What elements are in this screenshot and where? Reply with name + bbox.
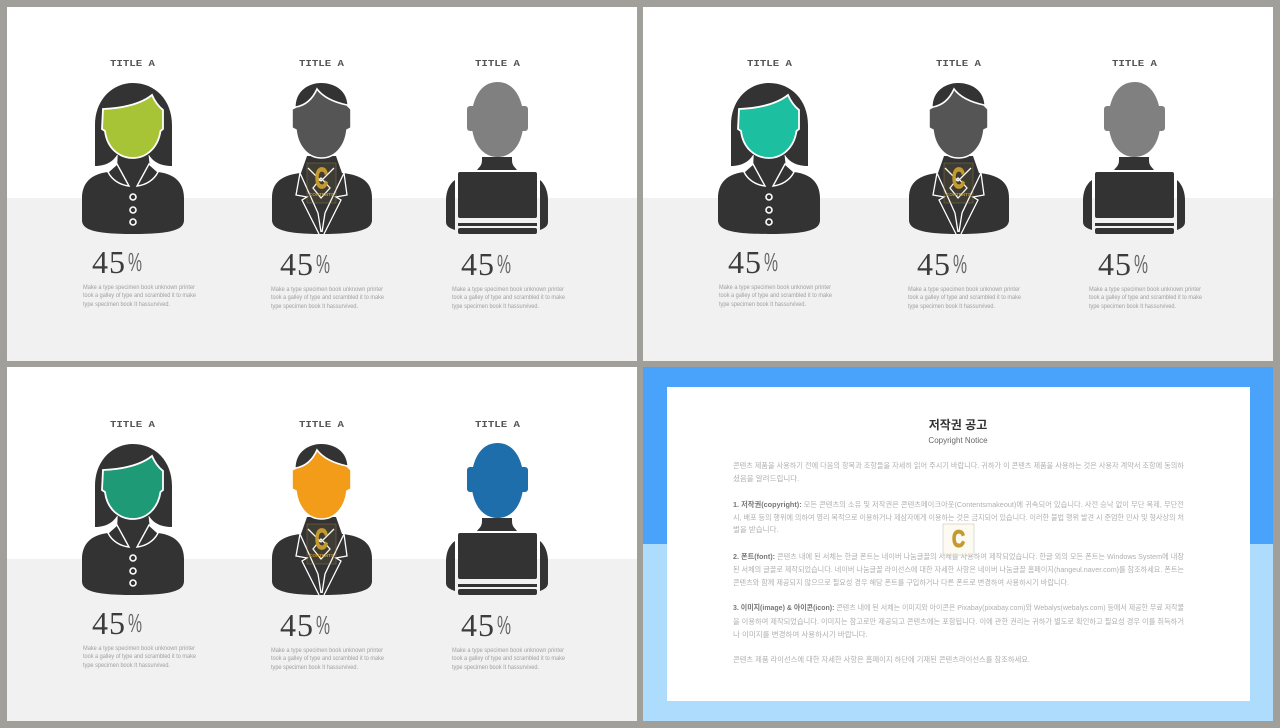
text block: copyright body: 시, 배포 등의 행위에 의하여 영리 목적으로 이용하거나 제삼자에게 이용하는 것은 금지되어 있습니다. 이러한 불법 행위 발견 시 준엄한 민사 및 형사상의 처: [733, 512, 1184, 522]
column: laptop: %: [1134, 249, 1148, 279]
column: laptop: Make a type specimen book unknown printer: [452, 287, 564, 293]
column: woman: type specimen book It hassurvived.: [83, 302, 170, 308]
column: man: %: [316, 610, 330, 640]
column: man: %: [953, 249, 967, 279]
column: woman: %: [128, 247, 142, 277]
column: woman: Make a type specimen book unknown printer: [719, 285, 831, 291]
column: woman: TITLE A: [110, 419, 155, 430]
column: laptop: took a galley of type and scrambled it to make: [452, 656, 566, 662]
column: woman: Make a type specimen book unknown printer: [83, 646, 195, 652]
column: man: 45: [280, 607, 314, 643]
watermark: gold logo: [307, 163, 336, 203]
column: man: type specimen book It hassurvived.: [271, 665, 358, 671]
watermark: gold logo: CONTENTS: [309, 553, 334, 558]
column: laptop: 45: [1098, 246, 1132, 282]
watermark: gold logo: C: [315, 163, 328, 195]
column: man: type specimen book It hassurvived.: [271, 304, 358, 310]
column: man: [908, 58, 1022, 310]
column: woman: Make a type specimen book unknown printer: [83, 285, 195, 291]
column: woman: [718, 58, 833, 308]
column: woman: took a galley of type and scrambled it to make: [83, 654, 197, 660]
watermark: gold logo: CONTENTS: [309, 192, 334, 197]
text block: copyright body: [733, 460, 1184, 664]
column: laptop: %: [497, 249, 511, 279]
column: man: took a galley of type and scrambled it to make: [271, 656, 385, 662]
heading: copyright: 저작권 공고: [929, 417, 987, 432]
text block: copyright body: 셨음을 알려드립니다.: [733, 473, 799, 483]
column: woman: type specimen book It hassurvived.: [719, 302, 806, 308]
column: woman: TITLE A: [747, 58, 792, 69]
column: man: took a galley of type and scrambled it to make: [271, 295, 385, 301]
column: laptop: [446, 58, 566, 310]
watermark: gold logo: [943, 524, 974, 555]
text block: copyright body: 2. 폰트(font): 콘텐츠 내에 된 서체는 한글 폰트는 네이버 나눔글꼴의 서체를 사용하여 제작되었습니다. 한글 외의 모든 폰트는 Windows System에 내장: [733, 551, 1184, 561]
text block: copyright body: 벌을 받습니다.: [733, 524, 779, 534]
text block: copyright body: 된 서체의 글꼴로 제작되었습니다. 네이버 나눔글꼴 라이선스에 대한 자세한 사항은 네이버 나눔글꼴 홈페이지(hangeul.naver.com)를 참조하세요. 폰트는: [733, 564, 1184, 574]
column: man: TITLE A: [299, 58, 344, 69]
column: man: %: [316, 249, 330, 279]
column: laptop: type specimen book It hassurvived.: [1089, 304, 1176, 310]
column: woman: [82, 58, 197, 308]
column: man: Make a type specimen book unknown printer: [271, 648, 383, 654]
column: laptop: [446, 419, 566, 671]
column: man: [271, 58, 385, 310]
column: man: type specimen book It hassurvived.: [908, 304, 995, 310]
text block: copyright body: 콘텐츠와 함께 제공되지 않으므로 필요성 경우 해당 폰트를 구입하거나 다른 폰트로 변경하여 사용하시기 바랍니다.: [733, 577, 1069, 587]
column: laptop: took a galley of type and scrambled it to make: [1089, 295, 1203, 301]
column: man: took a galley of type and scrambled it to make: [908, 295, 1022, 301]
panel: multicolour slide: [7, 367, 637, 721]
column: woman: %: [128, 608, 142, 638]
watermark: gold logo: C: [315, 524, 328, 556]
column: laptop: Make a type specimen book unknown printer: [452, 648, 564, 654]
column: man: Make a type specimen book unknown printer: [271, 287, 383, 293]
text block: copyright body: 1. 저작권(copyright): 모든 콘텐츠의 소유 및 저작권은 콘텐츠메이크아웃(Contentsmakeout)에 귀속되어 있습니다. 사전 승낙 없이 무단 복제, 무단전: [733, 499, 1184, 509]
column: laptop: type specimen book It hassurvived.: [452, 304, 539, 310]
column: laptop: took a galley of type and scrambled it to make: [452, 295, 566, 301]
column: laptop: 45: [461, 607, 495, 643]
column: woman: 45: [728, 244, 762, 280]
column: woman: [82, 419, 197, 669]
column: man: TITLE A: [299, 419, 344, 430]
column: laptop: [1083, 58, 1203, 310]
text block: copyright body: 을 이용하여 제작되었습니다. 이미지는 참고로만 제공되고 콘텐츠에는 포함됩니다. 이에 관한 권리는 귀하가 별도로 확인하고 필요성 경우 이를 취득하거: [733, 616, 1184, 626]
column: woman: took a galley of type and scrambled it to make: [83, 293, 197, 299]
text block: copyright body: 콘텐츠 제품 라이선스에 대한 자세한 사항은 홈페이지 하단에 기재된 콘텐츠라이선스를 참조하세요.: [733, 654, 1030, 664]
watermark: gold logo: CONTENTS: [946, 192, 971, 197]
column: man: Make a type specimen book unknown printer: [908, 287, 1020, 293]
column: laptop: TITLE A: [475, 419, 520, 430]
column: laptop: type specimen book It hassurvived.: [452, 665, 539, 671]
text block: copyright body: 콘텐츠 제품을 사용하기 전에 다음의 항목과 조항들을 자세히 읽어 주시기 바랍니다. 귀하가 이 콘텐츠 제품을 사용하는 것은 사용자 계약서 조항에 동의하: [733, 460, 1184, 470]
column: woman: took a galley of type and scrambled it to make: [719, 293, 833, 299]
column: man: 45: [917, 246, 951, 282]
column: woman: 45: [92, 244, 126, 280]
column: man: [271, 419, 385, 671]
text block: copyright body: 나 이미지를 변경하여 사용하시기 바랍니다.: [733, 629, 868, 639]
watermark: gold logo: C: [952, 526, 965, 553]
column: laptop: TITLE A: [1112, 58, 1157, 69]
column: man: TITLE A: [936, 58, 981, 69]
column: woman: TITLE A: [110, 58, 155, 69]
panel: teal slide: [643, 7, 1273, 361]
column: woman: %: [764, 247, 778, 277]
heading: copyright: [928, 417, 988, 445]
column: woman: 45: [92, 605, 126, 641]
watermark: gold logo: [307, 524, 336, 564]
column: laptop: TITLE A: [475, 58, 520, 69]
panel: copyright notice: [643, 367, 1273, 721]
column: laptop: 45: [461, 246, 495, 282]
column: laptop: Make a type specimen book unknown printer: [1089, 287, 1201, 293]
watermark: gold logo: C: [952, 163, 965, 195]
heading: copyright: Copyright Notice: [928, 436, 988, 445]
watermark: gold logo: [944, 163, 973, 203]
column: woman: type specimen book It hassurvived.: [83, 663, 170, 669]
column: man: 45: [280, 246, 314, 282]
text block: copyright body: 3. 이미지(image) & 아이콘(icon): 콘텐츠 내에 된 서체는 이미지와 아이콘은 Pixabay(pixabay.com)와 Webalys(webalys.com) 등에서 제공한 무료 저작물: [733, 602, 1184, 612]
column: laptop: %: [497, 610, 511, 640]
panel: green slide: [7, 7, 637, 361]
